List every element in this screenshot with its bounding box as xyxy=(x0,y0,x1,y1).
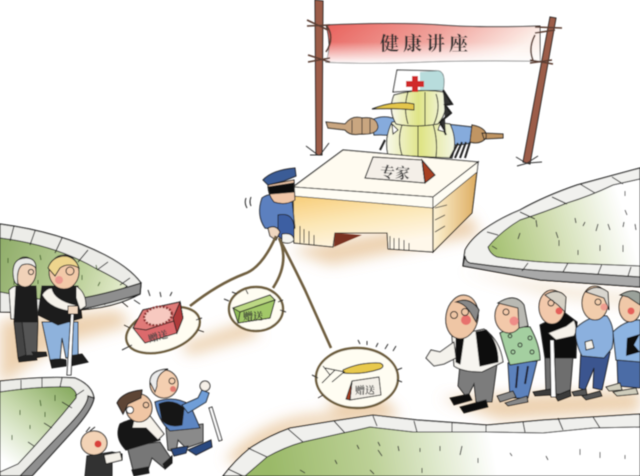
loop: red gift xyxy=(120,298,206,362)
lawn: top left xyxy=(0,224,141,313)
person: left elder with cane xyxy=(38,255,88,375)
body xyxy=(260,194,295,232)
scarecrow expert xyxy=(326,70,503,158)
person: bottom elder pointing xyxy=(150,369,222,456)
desk xyxy=(293,150,478,252)
hair xyxy=(440,90,452,135)
face xyxy=(268,180,295,204)
banner: 健康讲座 xyxy=(306,0,562,166)
gift label: red box: 赠送 xyxy=(147,328,169,345)
mask xyxy=(268,183,294,194)
hand xyxy=(268,227,280,240)
red cross xyxy=(406,76,424,92)
thief xyxy=(245,168,296,243)
gift: ginseng xyxy=(322,363,383,400)
nose xyxy=(372,103,414,110)
body xyxy=(387,121,455,158)
boots xyxy=(282,234,294,243)
desk opening xyxy=(334,233,362,247)
person: bottom elder with hat xyxy=(117,390,172,476)
desk top xyxy=(293,150,478,197)
person: bottom small elder xyxy=(81,427,122,476)
sparkle ticks xyxy=(122,290,402,398)
ropes and gifts xyxy=(120,236,402,408)
pole: right xyxy=(523,17,556,164)
pole base tufts xyxy=(306,143,542,166)
person: queue elder in green shirt xyxy=(495,298,540,406)
lawn: right xyxy=(463,168,640,287)
loop: green gift xyxy=(229,287,283,331)
collar xyxy=(392,124,445,134)
person: queue elder with open hand xyxy=(426,293,503,413)
motion ticks xyxy=(245,197,251,208)
rope lines xyxy=(190,236,331,348)
gift: red box xyxy=(133,302,183,345)
desk front xyxy=(293,187,433,252)
lawn: bottom centre xyxy=(223,414,640,476)
person: queue elder at right edge xyxy=(606,291,640,396)
cane xyxy=(67,311,74,375)
loop: ginseng xyxy=(316,348,398,408)
gift label: green box: 赠送 xyxy=(243,310,263,323)
desk side xyxy=(433,162,478,252)
rope knots xyxy=(307,20,562,64)
grass ticks xyxy=(8,191,636,474)
cane xyxy=(209,407,222,441)
person: left elder with white hair xyxy=(9,257,47,362)
cane xyxy=(550,340,556,397)
gift: green box xyxy=(233,295,275,323)
pole: left xyxy=(315,0,323,155)
hat xyxy=(263,168,296,185)
person: queue elder in blue xyxy=(572,286,613,400)
lawn: bottom left xyxy=(0,377,94,476)
name plate xyxy=(365,157,425,183)
arms xyxy=(372,117,472,145)
name plate label: 专家 xyxy=(379,163,411,183)
ground shadows xyxy=(0,215,640,465)
gift label: ginseng: 赠送 xyxy=(355,384,375,397)
hat xyxy=(393,70,444,92)
head xyxy=(391,91,446,126)
person: queue elder with cane xyxy=(533,290,577,401)
banner cloth xyxy=(326,24,540,63)
banner title: 健康讲座 xyxy=(380,32,472,55)
